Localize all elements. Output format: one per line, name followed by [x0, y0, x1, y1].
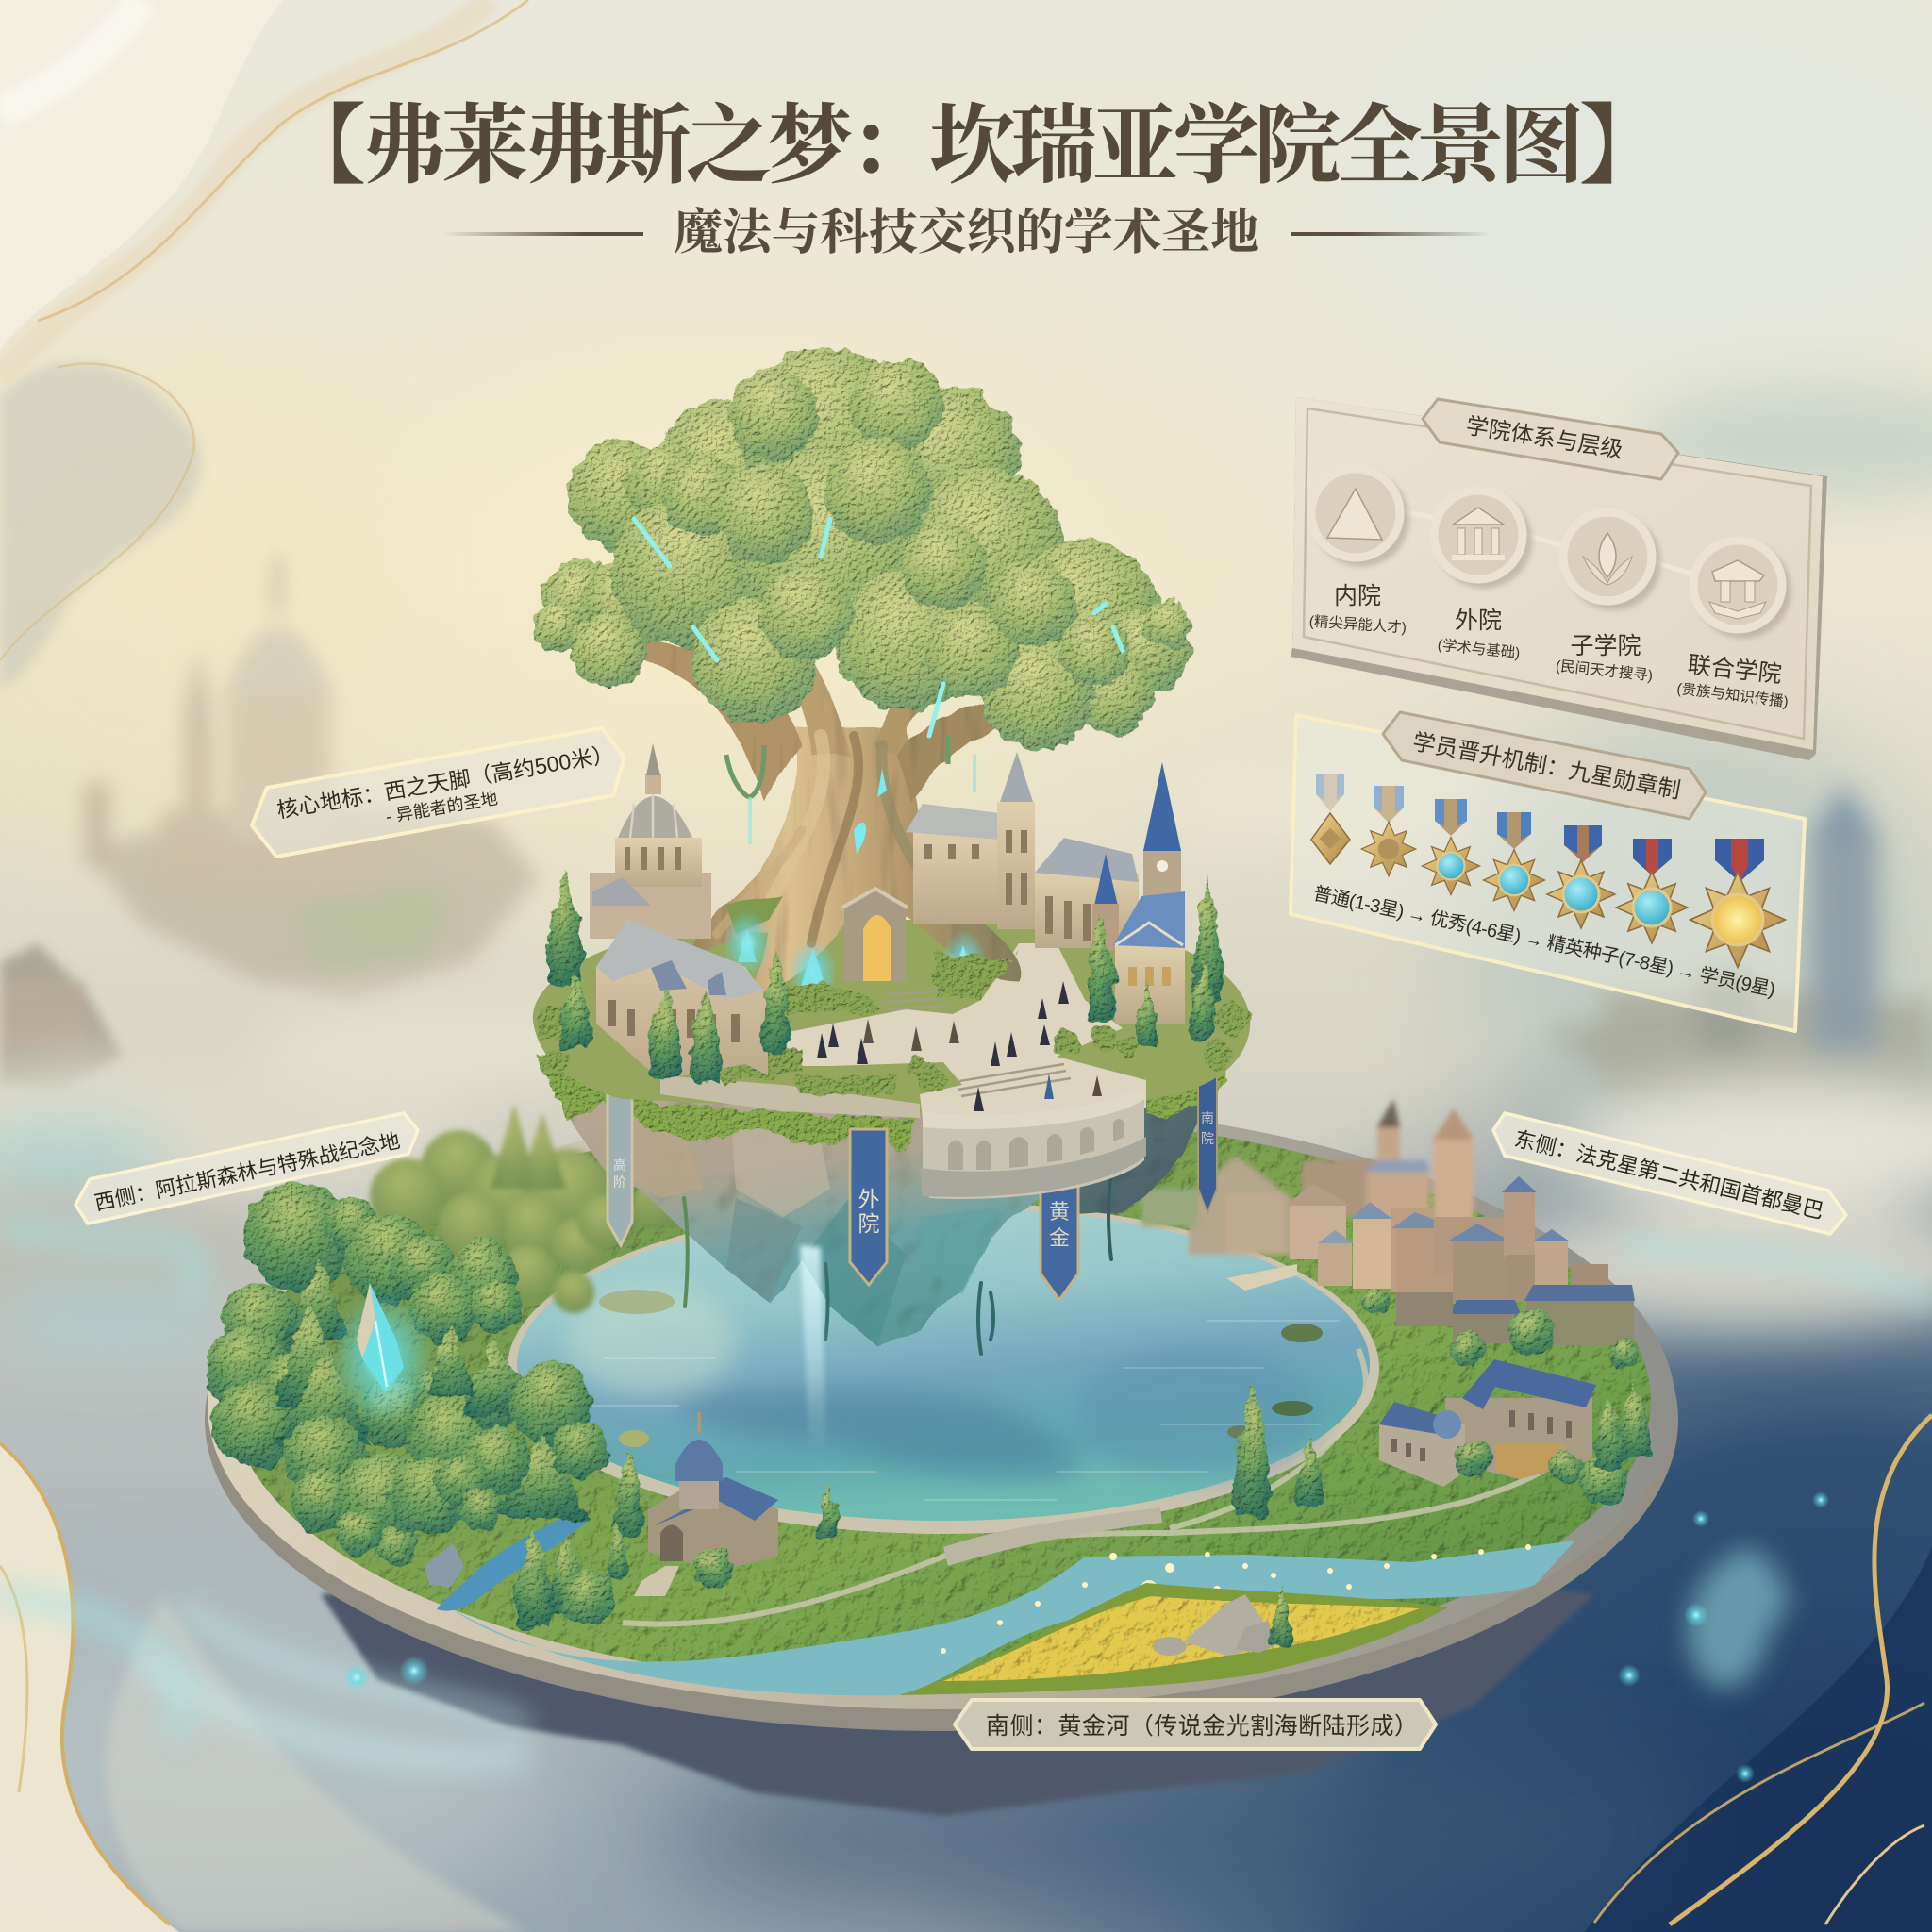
- plaza: [783, 943, 1146, 1119]
- island cypress trees: [546, 868, 1224, 1083]
- chapel door: [660, 1524, 683, 1561]
- union academy medallion: [1676, 541, 1791, 710]
- gothic blue-spire chapel: [1092, 762, 1185, 1024]
- medal 1: [1311, 774, 1350, 864]
- platform ground: [533, 920, 1250, 1113]
- stream from the forest: [437, 1511, 590, 1611]
- trunk flow lines: [717, 736, 972, 943]
- banner: far right: 院: [1201, 1131, 1214, 1146]
- system heading: 学院体系与层级: [1464, 413, 1624, 463]
- town front buildings: [1285, 1176, 1635, 1345]
- banner: outer court: 院: [858, 1211, 879, 1236]
- south chapel: [634, 1412, 778, 1596]
- banner: left: [608, 1094, 632, 1245]
- banner: far right: [1198, 1061, 1217, 1213]
- panel: nine-star promotion: [1291, 712, 1805, 1031]
- bottom-left silk ribbon: [0, 1443, 528, 1932]
- banner: right: 金: [1049, 1226, 1070, 1250]
- lake ripples: [566, 1321, 1340, 1500]
- distant castle right: [1547, 783, 1932, 1151]
- west forest: [206, 1104, 679, 1587]
- blue-roof manor: [1379, 1359, 1596, 1487]
- callout: west: 西侧：阿拉斯森林与特殊战纪念地: [92, 1128, 402, 1215]
- subtitle: [443, 206, 1491, 260]
- hanging vines from canopy: [726, 736, 974, 844]
- lake islets: [599, 1264, 1323, 1447]
- callout: east: 东侧：法克星第二共和国首都曼巴: [1512, 1127, 1825, 1224]
- lake: [517, 1208, 1370, 1521]
- banner: right: [1041, 1179, 1078, 1300]
- medal 2: [1361, 786, 1416, 876]
- top-left silk swirls: [0, 0, 528, 689]
- banner: far right: 南: [1201, 1110, 1214, 1125]
- callout: south: [955, 1700, 1436, 1749]
- dome hall: [590, 743, 711, 939]
- outer court medallion: 外院: [1455, 608, 1502, 634]
- promotion heading: 学员晋升机制：九星勋章制: [1410, 729, 1682, 804]
- island rock: [552, 1066, 1226, 1346]
- medal 7: [1690, 839, 1785, 967]
- far blurred trees: [370, 1104, 679, 1313]
- stream rock: [425, 1543, 464, 1587]
- callout: core landmark: - 异能者的圣地: [384, 789, 499, 826]
- stone slab: [1291, 397, 1827, 760]
- union academy medallion: 联合学院: [1687, 652, 1783, 688]
- east town: [1141, 1099, 1650, 1506]
- banner: right: 黄: [1049, 1200, 1070, 1224]
- banner: outer court: [850, 1129, 887, 1285]
- balcony: [920, 1085, 1146, 1199]
- tree trunk and roots: [604, 604, 1066, 1000]
- disc rim: [205, 1108, 1678, 1731]
- town back buildings: [1141, 1099, 1474, 1255]
- plaza stairs: [882, 991, 1071, 1096]
- promotion heading: [1383, 712, 1706, 819]
- callout: core landmark: [252, 728, 625, 857]
- floating island: [533, 604, 1250, 1354]
- distant island far left: [0, 943, 123, 1094]
- meadow boulders: [1153, 1594, 1274, 1656]
- outer court medallion: [1434, 491, 1532, 662]
- disc lawn: [232, 1113, 1651, 1689]
- lake rim: [508, 1202, 1379, 1534]
- union academy medallion: (贵族与知识传播): [1676, 680, 1790, 710]
- hanging vines: [684, 1170, 1111, 1354]
- bridge: [943, 1507, 1162, 1566]
- inner court medallion: (精尖异能人才): [1308, 612, 1407, 637]
- system heading: [1423, 399, 1678, 479]
- mist swirls behind the disc: [0, 1226, 1932, 1736]
- inner court medallion: 内院: [1334, 583, 1381, 609]
- rock facets: [604, 1113, 1000, 1346]
- banner: left: 阶: [613, 1174, 626, 1190]
- right hall: [1035, 838, 1139, 948]
- golden river: [443, 1541, 1575, 1695]
- paths on the lawn: [623, 1349, 1566, 1624]
- distant floating castle left: [85, 557, 538, 1000]
- medal 3: [1422, 799, 1480, 895]
- banner: left: 高: [613, 1158, 626, 1173]
- sub academy medallion: [1555, 512, 1661, 684]
- plaza figures: [817, 981, 1102, 1111]
- callout: core landmark: 核心地标：西之天脚（高约500米）: [275, 741, 616, 823]
- garden beds: [535, 948, 1248, 1094]
- glow particles: [343, 1491, 1829, 1783]
- root moss: [726, 896, 783, 934]
- outer court medallion: (学术与基础): [1437, 636, 1521, 662]
- front mist: [142, 1604, 528, 1758]
- long left hall: [596, 920, 768, 1080]
- near trees: [206, 1182, 608, 1566]
- moss fringe: [538, 1033, 1245, 1151]
- chapel body: [648, 1479, 778, 1571]
- banner: outer court: 外: [858, 1187, 879, 1211]
- callout: south: 南侧：黄金河（传说金光割海断陆形成）: [986, 1713, 1418, 1740]
- linking lines: [1396, 509, 1698, 575]
- east round trees: [1362, 1287, 1650, 1506]
- disc underside rock: [321, 1509, 1594, 1816]
- golden meadow: [899, 1583, 1448, 1695]
- back manor and tower: [906, 752, 1035, 929]
- lower disc: [205, 1102, 1678, 1731]
- clouds: [0, 387, 1932, 1358]
- waterfall: [800, 1245, 826, 1453]
- water sparkles: [941, 1544, 1531, 1654]
- promotion path text: 普通(1-3星) → 优秀(4-6星) → 精英种子(7-8星) → 学员(9星): [1311, 882, 1777, 1001]
- glowing crystals: [723, 769, 987, 1004]
- glass plate: [1291, 715, 1805, 1031]
- subtitle: 魔法与科技交织的学术圣地: [674, 206, 1259, 260]
- inner court medallion: [1308, 469, 1409, 637]
- sub academy medallion: 子学院: [1570, 633, 1641, 659]
- title: 【弗莱弗斯之梦：坎瑞亚学院全景图】: [279, 98, 1666, 194]
- terrace wall: [660, 1075, 920, 1118]
- medal 4: [1484, 812, 1544, 910]
- south trees: [515, 1382, 1323, 1648]
- panel: academy system: [1291, 397, 1827, 760]
- medal 5: [1547, 825, 1615, 928]
- chapel steps: [634, 1566, 679, 1596]
- tree canopy: [534, 347, 1192, 750]
- canopy glowing veins: [634, 519, 1123, 736]
- chapel dome: [675, 1440, 723, 1481]
- root gate: [842, 889, 908, 981]
- sub academy medallion: (民间天才搜寻): [1555, 658, 1654, 684]
- lake reflection: [566, 1283, 1321, 1481]
- forest crystal: [330, 1283, 434, 1424]
- bottom-right navy ribbons: [1585, 1415, 1932, 1932]
- medal 6: [1616, 839, 1688, 943]
